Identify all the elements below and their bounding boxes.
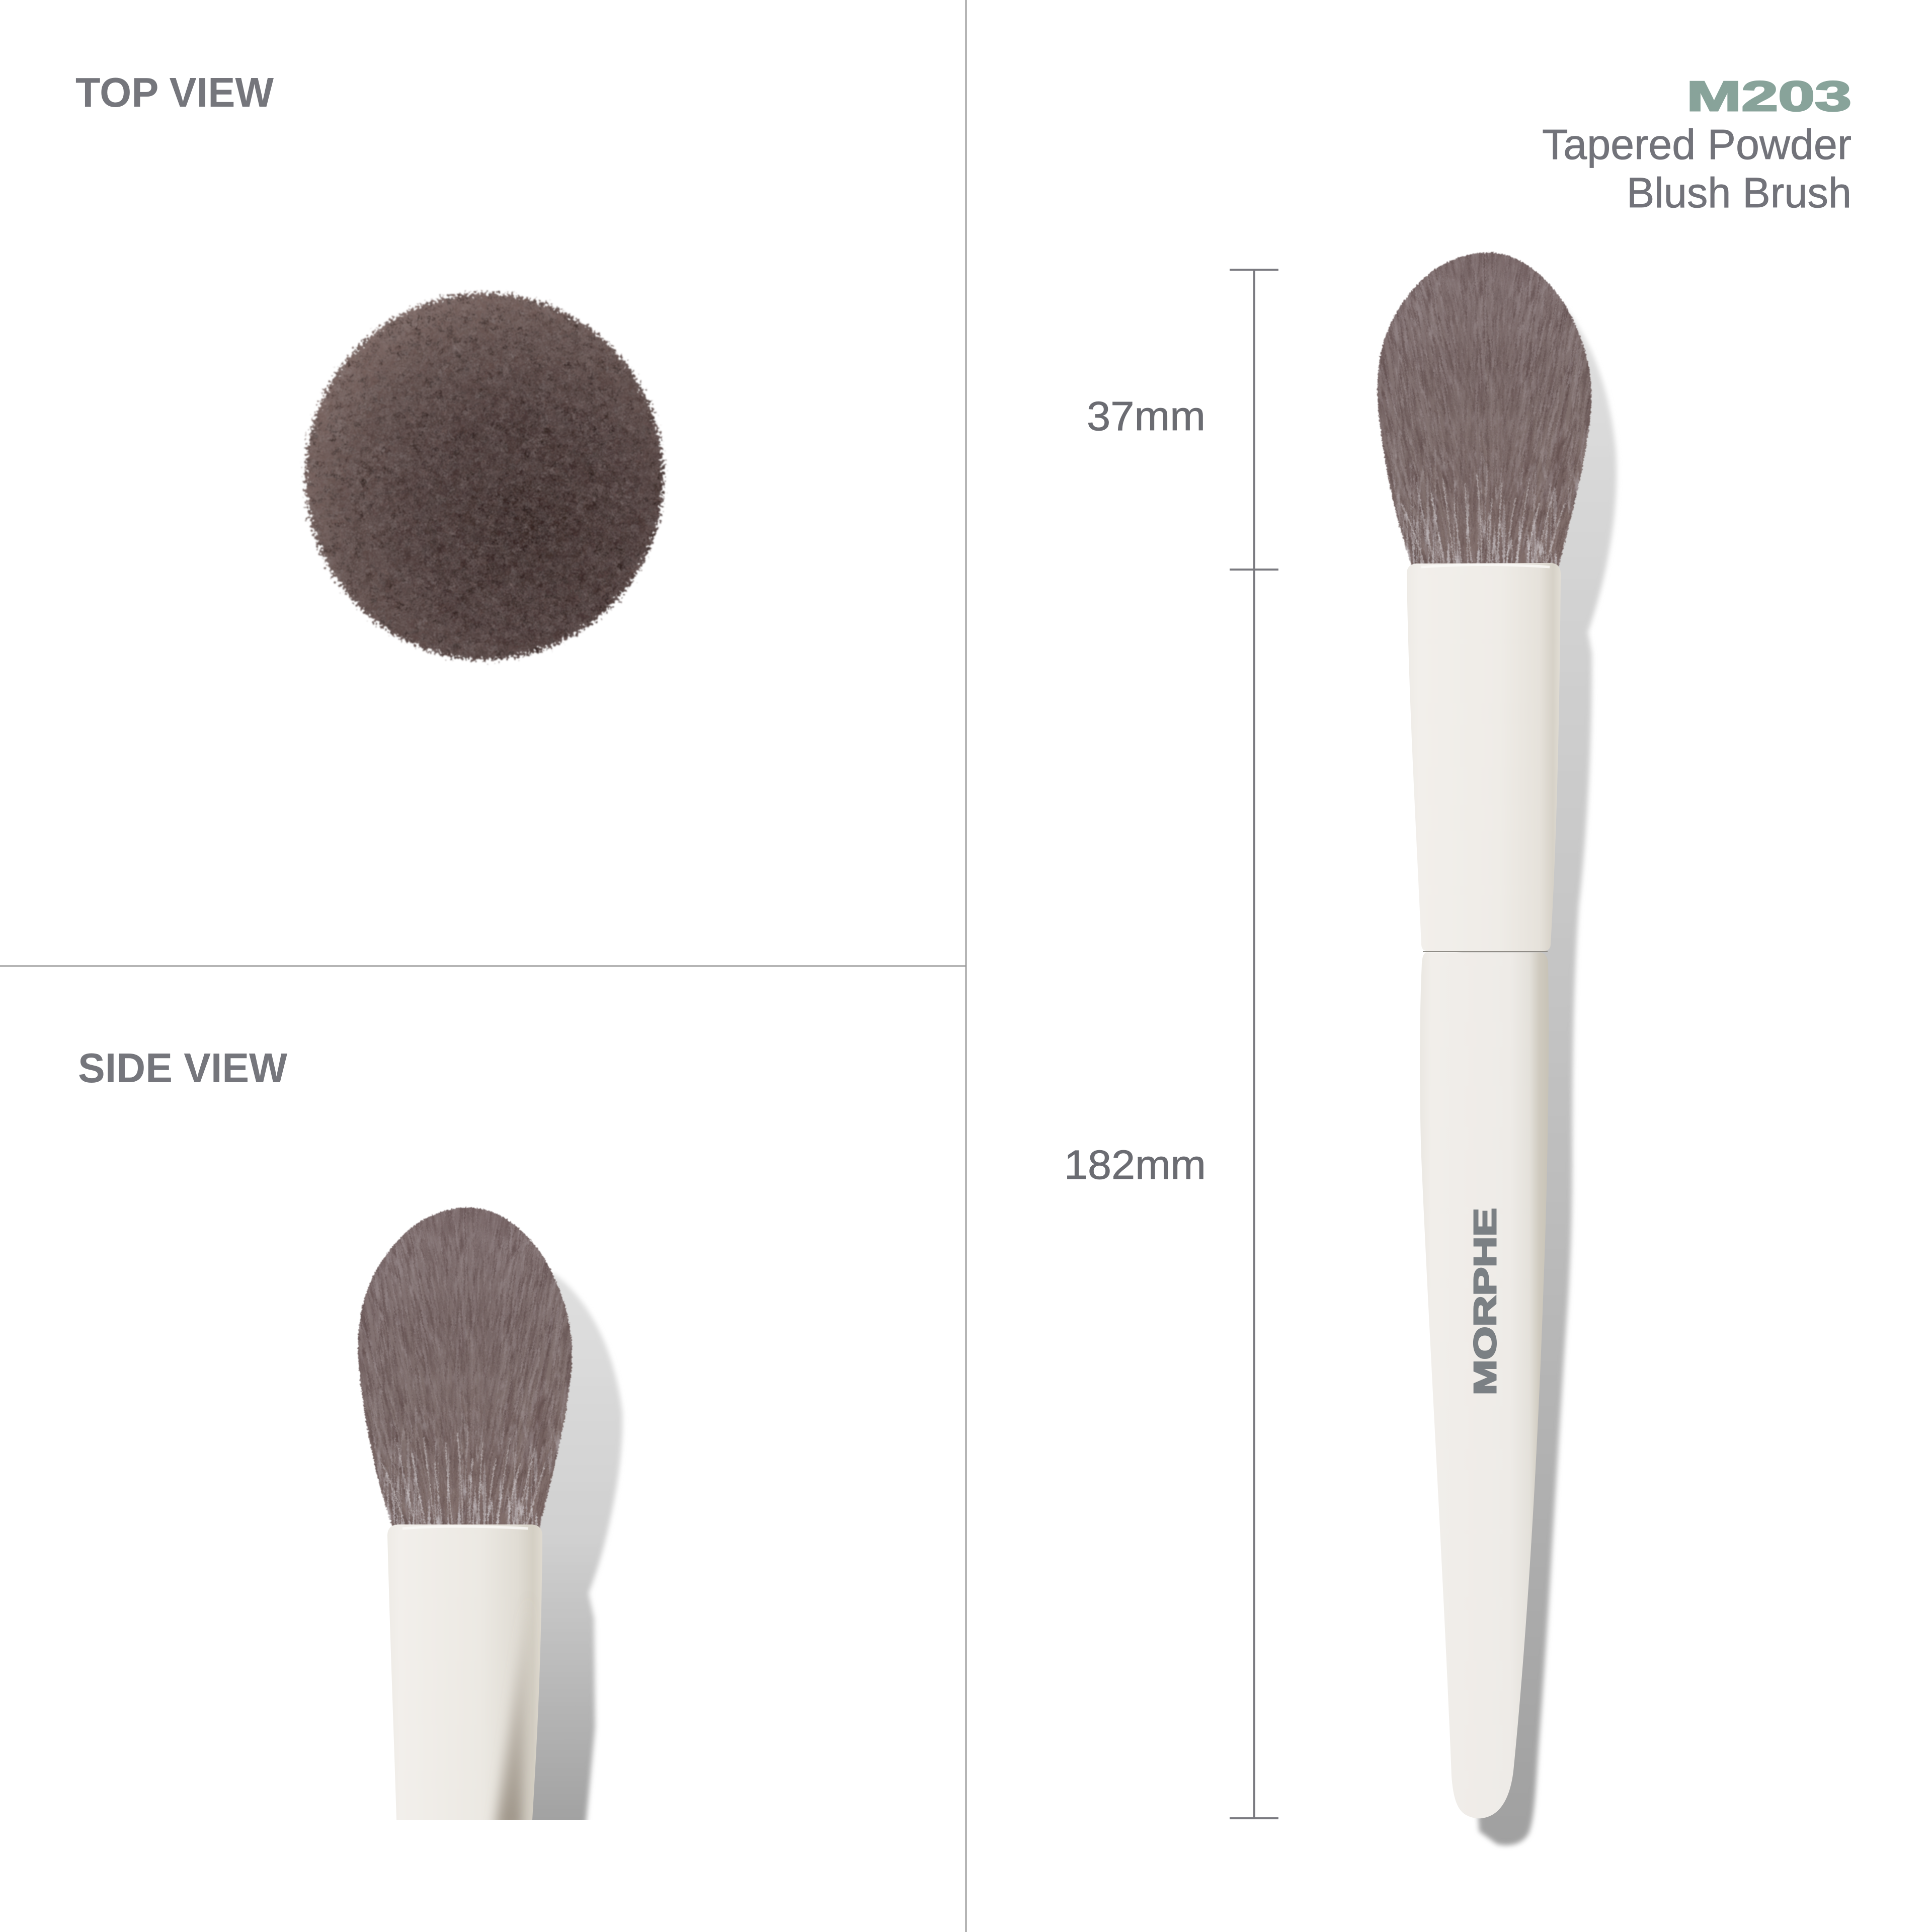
- brush shadow: [1459, 302, 1617, 1845]
- image: full brush: [1218, 170, 1751, 1845]
- panel: top view: [75, 69, 674, 669]
- product code: M203: [1686, 72, 1852, 120]
- bristles: [198, 1123, 732, 1614]
- heading: top view: TOP VIEW: [75, 69, 274, 116]
- brand wordmark: MORPHE: [1468, 1208, 1503, 1395]
- panel: side view: [78, 1044, 732, 1831]
- brush shadow: [453, 1273, 622, 1831]
- product name: [1542, 121, 1852, 216]
- brush ferrule: [387, 1524, 542, 1831]
- image: cropped brush side view: [198, 1123, 732, 1831]
- bristles: [1218, 170, 1751, 651]
- product name: Blush Brush: [1627, 169, 1852, 216]
- heading: side view: SIDE VIEW: [78, 1044, 288, 1091]
- product title block: [1542, 72, 1852, 216]
- dimension bracket: [1230, 270, 1278, 1818]
- product name: Tapered Powder: [1542, 121, 1852, 168]
- brush ferrule: [1407, 563, 1561, 951]
- measurement: handle length: 182mm: [1064, 1142, 1206, 1188]
- brush handle: [1420, 952, 1549, 1818]
- panel: full brush dimensions: [1064, 72, 1852, 1845]
- measurement: bristle length: 37mm: [1087, 393, 1205, 439]
- image: brush head seen from above: [297, 287, 674, 669]
